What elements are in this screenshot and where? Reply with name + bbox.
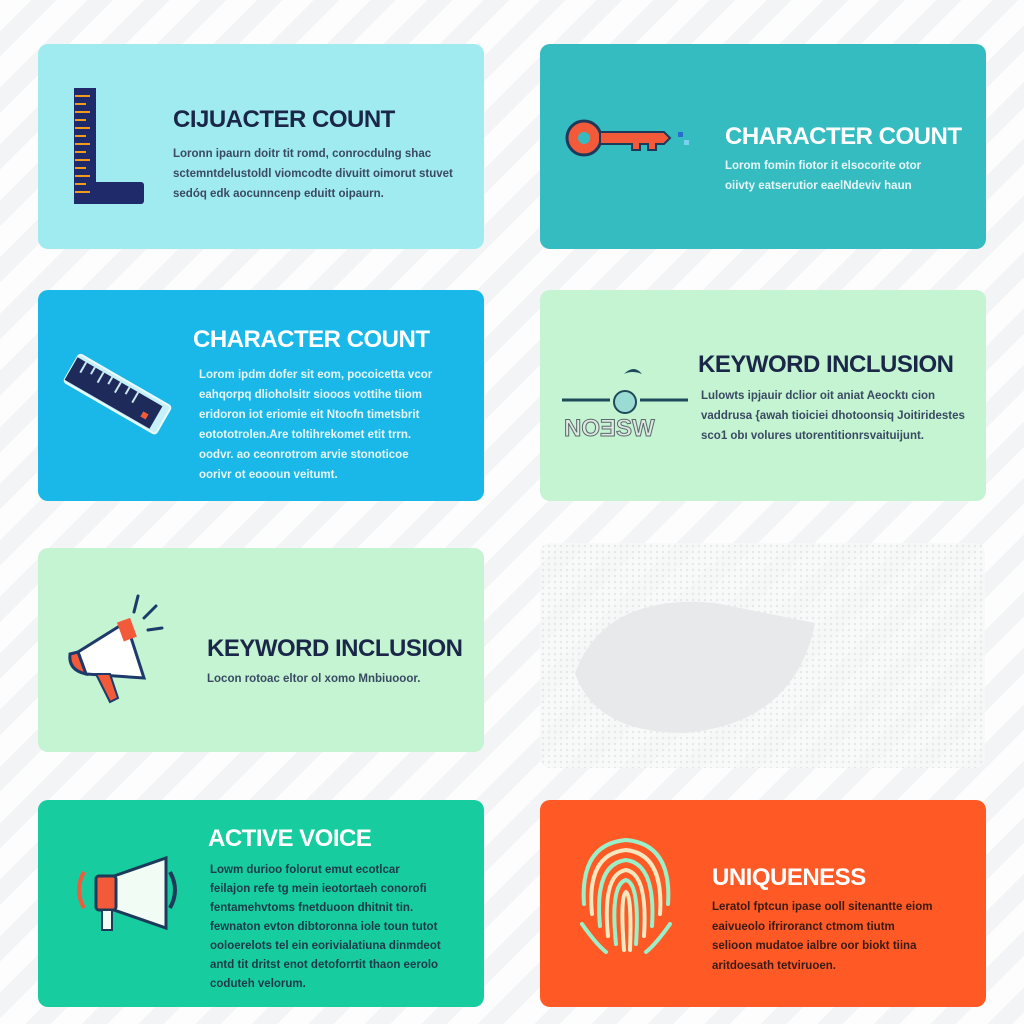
body text (210, 864, 441, 990)
body text: ooloerelots tel ein eorivialatiuna dinmdeot (210, 940, 441, 952)
body text: oorivr ot eoooun veitumt. (199, 469, 338, 481)
body text: Locon rotoac eltor ol xomo Mnbiuooor. (207, 673, 420, 685)
body text: sedóq edk aocunncenp eduitt oipaurn. (173, 188, 384, 200)
icon: keyword symbol (562, 369, 688, 440)
icon: megaphone (68, 594, 164, 704)
body text: oodvr. ao ceonrotrom arvie stonoticoe (199, 449, 409, 461)
body text: Lorom fomin fiotor it elsocorite otor (725, 160, 921, 172)
body text: aritdoesath tetviruoen. (712, 960, 836, 972)
body text: sco1 obı volures utorentitionrsvaituijunt. (701, 430, 924, 442)
body text (725, 160, 921, 192)
icon: faded shape (575, 602, 815, 733)
body text: fentamehvtoms fnetduoon dhitnit tin. (210, 902, 413, 914)
icon: key (566, 120, 689, 156)
title: CHARACTER COUNT (193, 326, 429, 353)
body text: selioon mudatoe ialbre oor biokt tiina (712, 940, 916, 952)
body text: oiivty eatserutior eaelNdeviv haun (725, 180, 912, 192)
body text: fewnaton evton dibtoronna iole toun tutot (210, 921, 437, 933)
icon: L ruler (74, 88, 144, 204)
title: ACTIVE VOICE (208, 825, 371, 852)
body text: eahqorpq dlioholsitr siooos vottihe tiiom (199, 389, 422, 401)
body text: eaivueolo ifriroranct ctmom tiutm (712, 920, 895, 932)
body text: antd tit dritst enot detoforrtit thaon eerolo (210, 959, 438, 971)
title: KEYWORD INCLUSION (207, 635, 462, 662)
card: uniqueness (540, 800, 986, 1007)
title: KEYWORD INCLUSION (698, 351, 954, 378)
body text: vaddrusa {awah tioiciei dhotoonsiq Joitiridestes (701, 410, 965, 422)
icon: fingerprint (580, 838, 672, 954)
body text (199, 369, 432, 481)
title: CIJUACTER COUNT (173, 106, 395, 133)
body text (173, 148, 453, 200)
card: faded placeholder (540, 543, 985, 768)
body text: coduteh velorum. (210, 978, 306, 990)
body text: Lulowts ipjauir dclior oit aniat Aeocktı cion (701, 390, 935, 402)
card: character count 2 (540, 44, 986, 249)
icon: megaphone (76, 856, 177, 931)
icon: tilted ruler (64, 354, 172, 434)
body text: Lowm durioo folorut emut ecotlcar (210, 864, 400, 876)
card: character count 3 (38, 290, 484, 501)
title: CHARACTER COUNT (725, 123, 961, 150)
card: keyword inclusion 1 (540, 290, 986, 501)
card: keyword inclusion 2 (38, 548, 484, 752)
body text (701, 390, 965, 442)
body text: sctemntdelustoldl viomcodte divuitt oimorut stuvet (173, 168, 453, 180)
body text: eridoron iot eriomie eit Ntoofn timetsbrit (199, 409, 419, 421)
body text: eotototrolen.Are toltihrekomet etit trrn. (199, 429, 411, 441)
body text: feilajon refe tg mein ieotortaeh conorofi (210, 883, 427, 895)
body text: Loronn ipaurn doitr tit romd, conrocdulng shac (173, 148, 431, 160)
body text (712, 901, 932, 972)
body text: Leratol fptcun ipase ooll sitenantte eiom (712, 901, 932, 913)
card: active voice (38, 800, 484, 1007)
title: UNIQUENESS (712, 864, 866, 891)
card: character count 1 (38, 44, 484, 249)
body text: Lorom ipdm dofer sit eom, pocoicetta vcor (199, 369, 432, 381)
